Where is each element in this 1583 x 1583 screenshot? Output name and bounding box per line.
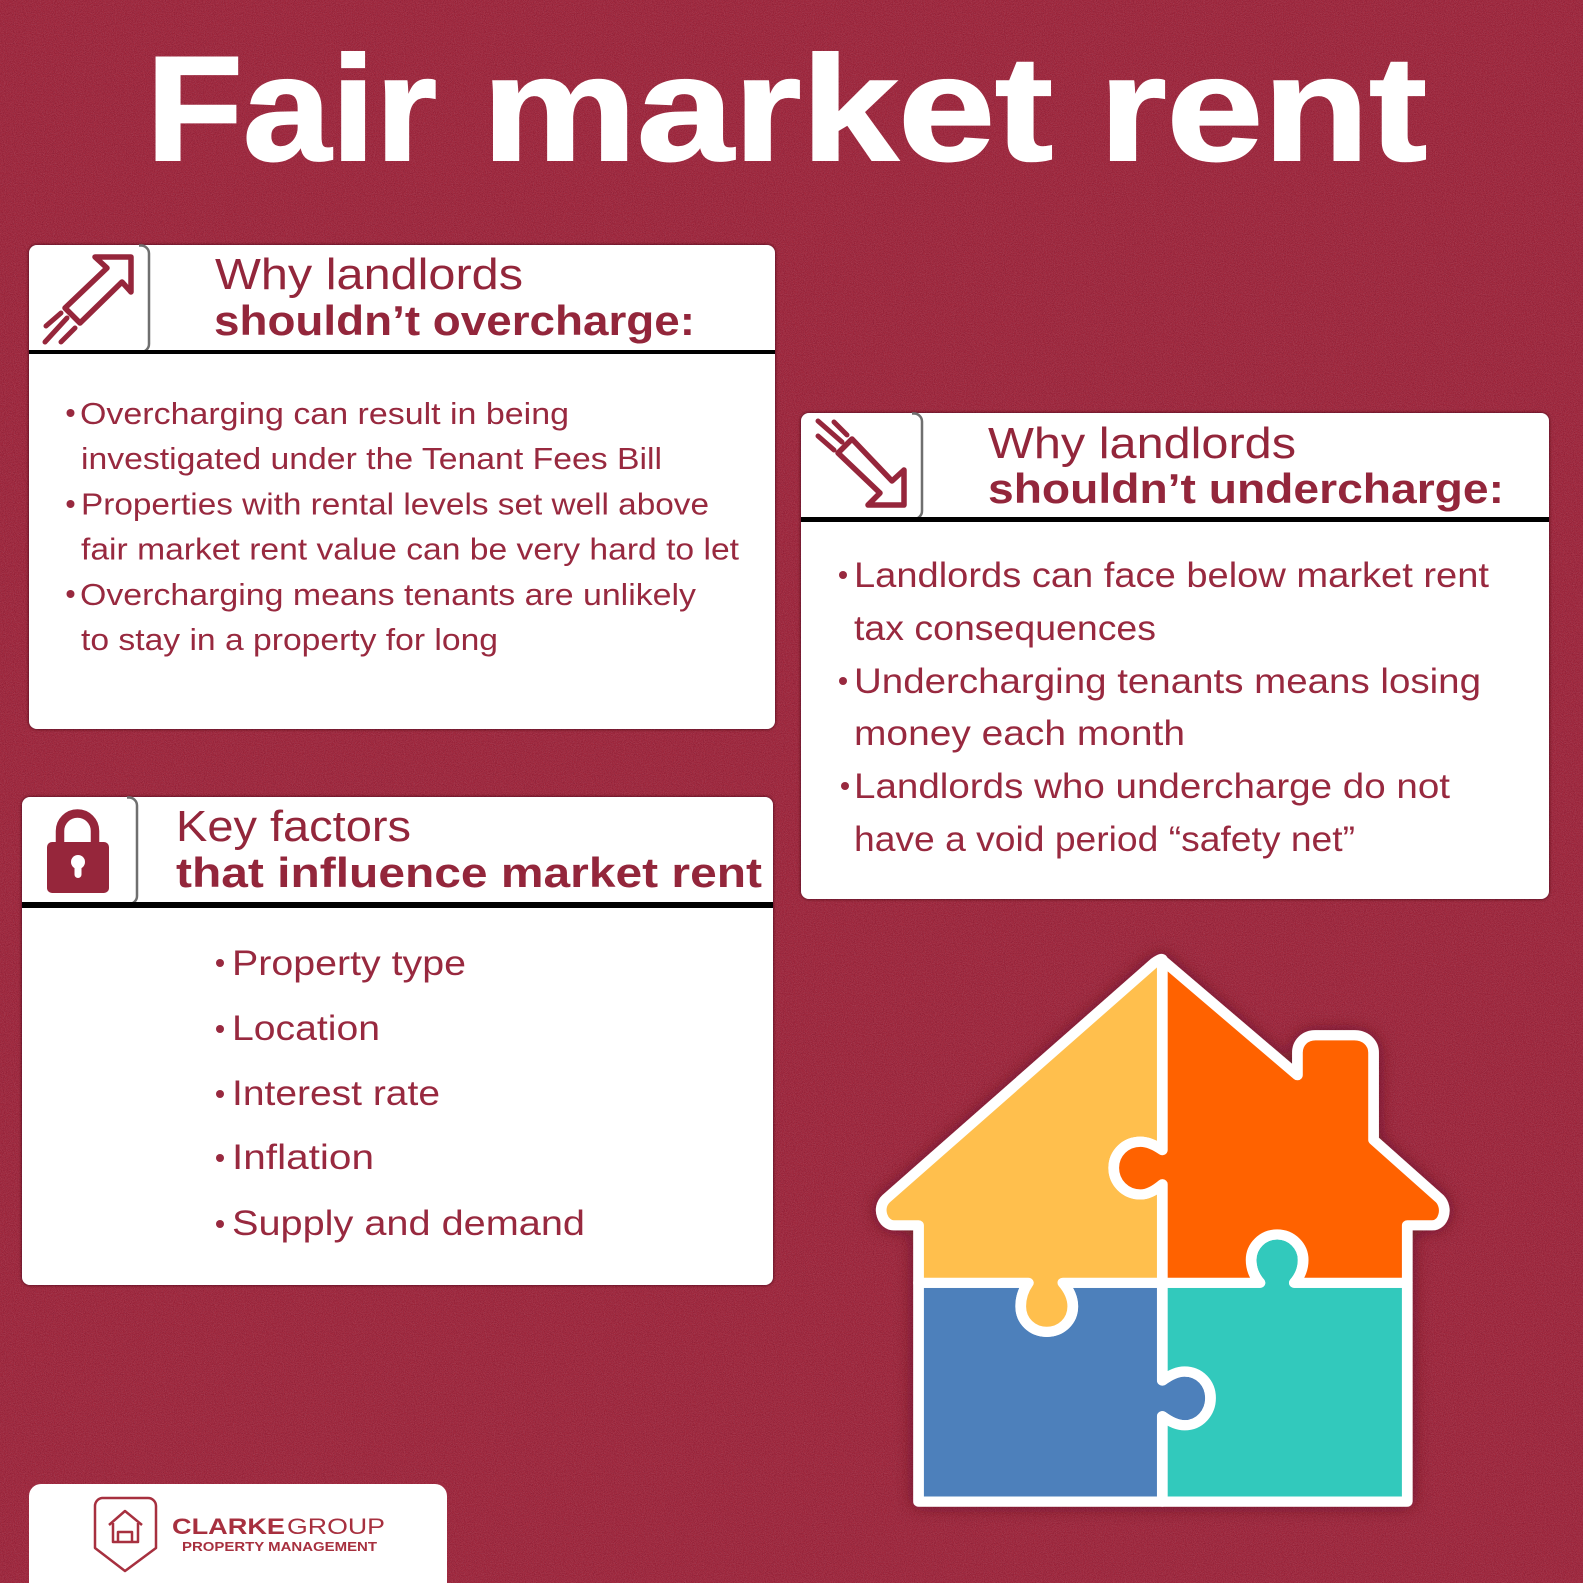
puzzle piece: blue xyxy=(919,1283,1211,1502)
logo wordmark second part: GROUP xyxy=(287,1514,385,1539)
title: market xyxy=(482,25,1053,192)
heading: Why landlords xyxy=(988,419,1296,468)
heading xyxy=(176,802,762,896)
bullet list: Undercharging tenants means losing xyxy=(854,662,1481,701)
bullet list xyxy=(66,396,739,657)
title xyxy=(146,25,1427,192)
bullet list: fair market rent value can be very hard to let xyxy=(81,532,739,566)
icon box with padlock xyxy=(47,798,137,904)
bullet list: Location xyxy=(232,1009,380,1048)
bullet list: Landlords who undercharge do not xyxy=(854,767,1450,806)
heading: shouldn’t overcharge: xyxy=(214,297,695,344)
puzzle piece: yellow xyxy=(881,959,1162,1332)
logo wordmark: CLARKE xyxy=(172,1514,285,1539)
bullet list: Property type xyxy=(232,944,466,983)
bullet list xyxy=(216,944,585,1243)
bullet list: Landlords can face below market rent xyxy=(854,556,1489,595)
logo card xyxy=(29,1484,447,1583)
title: rent xyxy=(1099,25,1427,192)
heading: that influence market rent xyxy=(176,849,762,896)
bullet list: tax consequences xyxy=(854,609,1156,648)
bullet list: Overcharging means tenants are unlikely xyxy=(80,577,697,612)
bullet list: Interest rate xyxy=(232,1074,440,1113)
icon box with rising arrow xyxy=(45,246,149,352)
bullet list: Properties with rental levels set well above xyxy=(81,486,709,522)
bullet list: investigated under the Tenant Fees Bill xyxy=(81,441,662,476)
icon: jigsaw puzzle house xyxy=(881,959,1444,1502)
logo tagline: PROPERTY MANAGEMENT xyxy=(182,1539,377,1554)
title: Fair xyxy=(146,25,437,192)
bullet list xyxy=(839,556,1489,859)
bullet list: Inflation xyxy=(232,1138,374,1177)
puzzle piece: orange xyxy=(1114,960,1444,1283)
icon: shield with house xyxy=(95,1498,156,1571)
puzzle piece: teal xyxy=(1162,1234,1407,1502)
panel: why landlords shouldn't undercharge xyxy=(801,413,1549,899)
bullet list: Overcharging can result in being xyxy=(80,396,569,431)
bullet list: have a void period “safety net” xyxy=(854,820,1355,859)
heading xyxy=(214,250,695,344)
heading: Why landlords xyxy=(215,250,523,299)
heading: shouldn’t undercharge: xyxy=(988,465,1504,512)
bullet list: Supply and demand xyxy=(232,1204,585,1243)
heading: Key factors xyxy=(176,802,411,851)
heading xyxy=(988,419,1504,512)
icon box with falling arrow xyxy=(818,414,922,519)
bullet list: money each month xyxy=(854,714,1185,753)
panel: key factors xyxy=(22,797,773,1285)
panel: why landlords shouldn't overcharge xyxy=(29,245,775,729)
bullet list: to stay in a property for long xyxy=(81,622,498,657)
